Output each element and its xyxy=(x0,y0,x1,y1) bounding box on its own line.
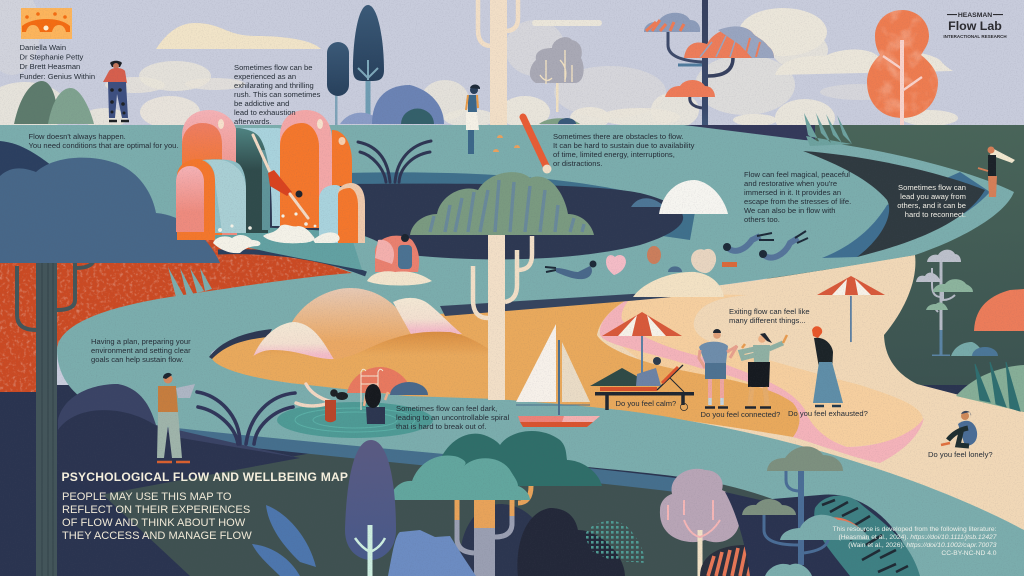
peach sand xyxy=(600,293,923,447)
swimmer woman xyxy=(296,384,348,422)
beach sand xyxy=(560,255,1024,532)
big blue tree xyxy=(0,141,220,576)
note: thrilling rush: rush. This can sometimes xyxy=(234,90,321,99)
question: exhausted: Do you feel exhausted? xyxy=(788,409,868,418)
sailboat xyxy=(516,324,600,427)
sky background xyxy=(0,0,1024,130)
grey-green tree xyxy=(742,446,870,576)
icon: red pole xyxy=(523,117,552,174)
front arches xyxy=(177,159,215,240)
green dome with spikes xyxy=(956,362,1024,412)
coral shapes xyxy=(606,246,737,275)
man in striped shirt xyxy=(699,329,737,408)
subtitle: THEY ACCESS AND MANAGE FLOW xyxy=(62,530,252,542)
dark river edge xyxy=(218,252,366,274)
dotted teal shrub xyxy=(585,521,645,563)
title: PSYCHOLOGICAL FLOW AND WELLBEING MAP xyxy=(62,470,348,484)
authors block: Funder: Genius Within xyxy=(20,72,95,81)
fern xyxy=(197,392,295,444)
note: magical: We can also be in flow with xyxy=(744,206,835,215)
diver xyxy=(253,135,308,218)
icon: mushroom tree xyxy=(644,0,774,182)
question: connected: Do you feel connected? xyxy=(700,410,780,419)
note: exiting flow: Exiting flow can feel like xyxy=(729,307,810,316)
horizon-edge fern xyxy=(358,141,431,182)
icon: small domes xyxy=(539,118,580,124)
note: exiting flow: many different things... xyxy=(729,316,806,325)
clouds xyxy=(0,0,958,137)
icon: Flow Lab logo: HEASMAN xyxy=(958,12,992,19)
black shrub xyxy=(517,508,625,576)
bottom green ground xyxy=(100,453,870,576)
pink purple tree xyxy=(660,469,740,576)
icon: Flow Lab logo xyxy=(943,12,1007,39)
note: lead away from others: hard to reconnect. xyxy=(905,210,966,219)
red land spikes xyxy=(168,267,212,301)
credits: CC-BY-NC-ND 4.0 xyxy=(941,550,997,557)
icon: umbrella right xyxy=(817,276,885,342)
kneeling figure with foam xyxy=(367,234,432,286)
woman with hair blowing xyxy=(978,146,1015,197)
coral dome and ladder xyxy=(347,367,413,393)
note: magical: others too. xyxy=(744,215,780,224)
foam xyxy=(213,212,340,253)
note: conditions: Flow doesn't always happen. xyxy=(28,132,126,141)
grass spikes xyxy=(804,113,852,146)
orange sand xyxy=(210,298,799,437)
swimmer left xyxy=(545,260,596,279)
dark channel xyxy=(803,151,985,257)
reader figure xyxy=(157,373,195,462)
dark teal canopy xyxy=(435,431,602,486)
central green tree xyxy=(410,172,594,400)
credits: (Heasman et al., 2024). https://doi/10.1111/jtsb.12427 xyxy=(838,534,996,541)
person in wide trousers xyxy=(812,326,843,406)
note: conditions: You need conditions that are optimal for you. xyxy=(28,141,179,150)
dark pool xyxy=(225,184,683,259)
pool xyxy=(214,225,362,270)
note: obstacles: It can be hard to sustain due to availability xyxy=(553,141,695,150)
icon: cream cactus tree xyxy=(478,0,518,125)
note: magical: immersed in it. It provides an xyxy=(744,188,841,197)
icon: green hills xyxy=(14,81,94,124)
dark hill shading xyxy=(58,410,300,495)
right dark green land xyxy=(680,125,1024,425)
back arches xyxy=(182,110,237,235)
teal river xyxy=(0,125,1024,576)
icon: small dark tree xyxy=(327,42,349,125)
question: calm: Do you feel calm? xyxy=(616,399,676,408)
note: dark flow: leading to an uncontrollable spiral xyxy=(396,413,509,422)
exiting-flow people xyxy=(699,326,843,408)
blue fan shrub xyxy=(388,530,476,576)
cactus lower xyxy=(488,320,505,400)
central woman figure xyxy=(466,84,520,154)
note: dark flow: that is hard to break out of. xyxy=(396,422,486,431)
note: obstacles: of time, limited energy, interruptions, xyxy=(553,150,675,159)
man looking at horizon xyxy=(103,61,129,121)
icon: Flow Lab logo: Flow Lab xyxy=(948,19,1002,33)
lonely person xyxy=(941,411,977,446)
note: thrilling rush: exhilarating and thrilling xyxy=(234,81,314,90)
dark teal shrub xyxy=(814,496,920,576)
dark round behind trunks xyxy=(460,504,540,576)
pink sand band xyxy=(600,298,924,463)
dark crescent by sand xyxy=(209,329,272,359)
water ripples xyxy=(493,135,520,152)
note: having a plan: Having a plan, preparing your xyxy=(91,337,191,346)
red land xyxy=(0,240,352,392)
icon: fan shrubs xyxy=(340,85,444,124)
right hillside tree xyxy=(916,250,973,356)
note: having a plan: goals can help sustain flow. xyxy=(91,355,183,364)
icon: Flow Lab logo: INTERACTIONAL RESEARCH xyxy=(943,34,1007,39)
note: thrilling rush: be addictive and xyxy=(234,99,289,108)
credits: This resource is developed from the following literature: xyxy=(833,526,997,533)
bottom navy ground xyxy=(0,385,1024,576)
trunks xyxy=(457,486,531,576)
note: magical: and restorative when you're xyxy=(744,179,837,188)
authors block: Daniella Wain xyxy=(20,43,66,52)
note: having a plan: environment and setting clear xyxy=(91,346,191,355)
light teal canopy xyxy=(390,456,530,500)
teal and blue domes xyxy=(951,342,998,356)
pool blue rim xyxy=(345,172,695,240)
note: lead away from others: Sometimes flow can xyxy=(898,183,966,192)
note: thrilling rush: lead to exhaustion xyxy=(234,108,296,117)
cream cloud xyxy=(156,23,321,49)
note: dark flow: Sometimes flow can feel dark, xyxy=(396,404,497,413)
note: magical: Flow can feel magical, peaceful xyxy=(744,170,850,179)
note: obstacles: or distractions. xyxy=(553,159,602,168)
note: thrilling rush: afterwards. xyxy=(234,117,272,126)
teal shrub lower trees xyxy=(390,431,602,576)
subtitle: OF FLOW AND THINK ABOUT HOW xyxy=(62,517,246,529)
sand hills xyxy=(243,272,724,400)
authors block: Dr Stephanie Petty xyxy=(20,52,83,62)
coral shrub xyxy=(700,545,792,576)
subtitle: PEOPLE MAY USE THIS MAP TO xyxy=(62,491,232,503)
icon: tall dark tree xyxy=(353,5,384,124)
icon: white fan shrub xyxy=(631,180,728,214)
icon: orange tree xyxy=(867,10,938,148)
note: obstacles: Sometimes there are obstacles to flow. xyxy=(553,132,683,141)
note: lead away from others: others, and it can be xyxy=(897,201,966,210)
swimmer with dark hair xyxy=(364,384,388,424)
dark horizon wedge xyxy=(640,125,815,150)
dark channel right xyxy=(822,172,990,258)
coral fan xyxy=(974,289,1024,331)
blue leaves lower left xyxy=(252,505,316,576)
note: magical: escape from the stresses of life. xyxy=(744,197,851,206)
note: thrilling rush: Sometimes flow can be xyxy=(234,63,313,72)
question: lonely: Do you feel lonely? xyxy=(928,450,993,459)
dark hill lower left xyxy=(58,384,300,490)
icon: project logo xyxy=(21,8,72,39)
waterfall xyxy=(176,110,365,270)
authors block: Dr Brett Heasman xyxy=(20,62,80,71)
two swimmers right xyxy=(723,231,808,258)
background trees and plants on horizon xyxy=(327,0,584,125)
purple tall tree xyxy=(345,440,396,576)
subtitle: REFLECT ON THEIR EXPERIENCES xyxy=(62,504,250,516)
dark land under trees xyxy=(725,492,918,576)
swimming pool xyxy=(277,367,433,438)
lounger figure xyxy=(590,357,694,411)
icon: grey tree xyxy=(530,37,584,112)
note: thrilling rush: experienced as an xyxy=(234,72,296,81)
icon: umbrella left xyxy=(602,312,682,380)
dark blue distant dome xyxy=(668,266,682,272)
credits: (Wain et al., 2026). https://doi/10.1002/capr.70073 xyxy=(848,542,996,549)
woman in green top xyxy=(741,333,787,408)
red land highlight xyxy=(0,240,352,392)
blue river edge xyxy=(140,428,700,488)
note: lead away from others: lead you away from xyxy=(900,192,966,201)
dark stripe by sand xyxy=(440,291,682,316)
